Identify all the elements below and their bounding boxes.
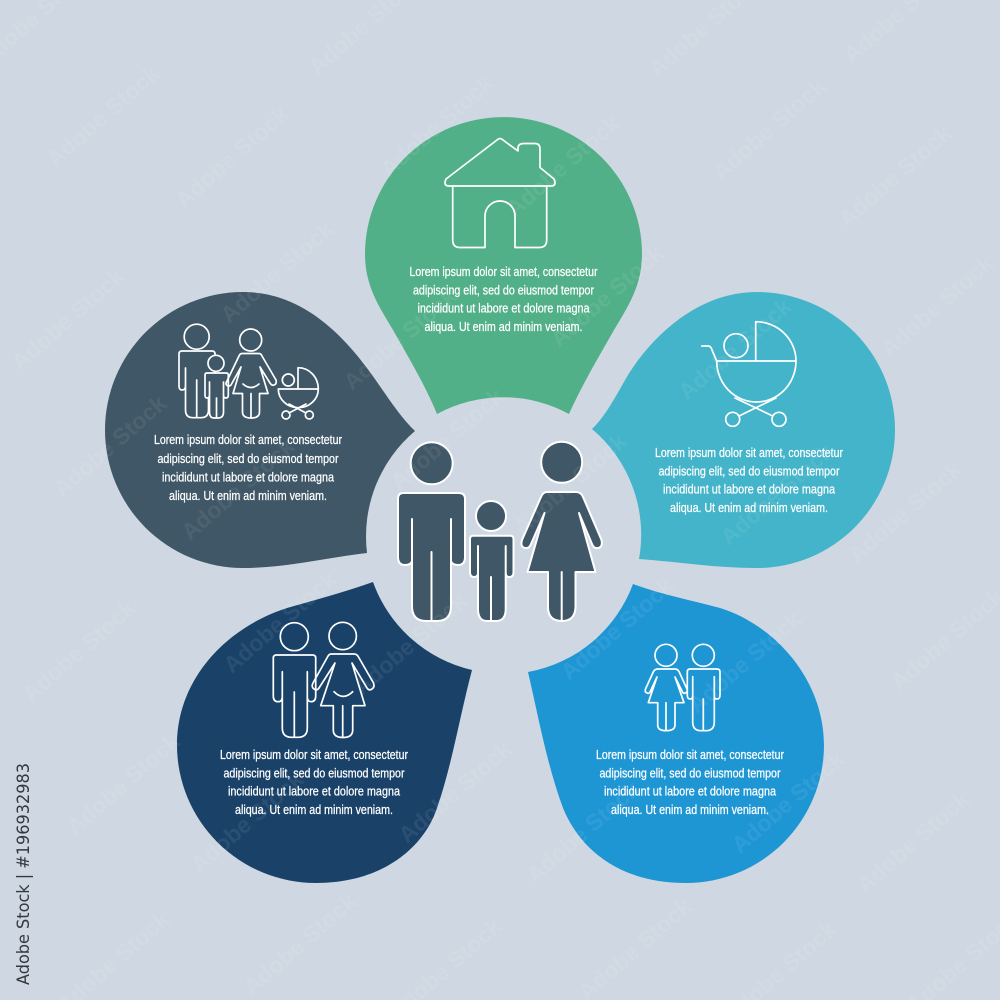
text: Adobe Stock [61,728,184,840]
text: Adobe Stock [215,216,338,328]
icon: house [445,138,555,248]
panel: cyan stroller petal [592,292,895,568]
text: Adobe Stock [843,456,966,568]
icon: central family figures [398,442,602,621]
panel: blue couple petal [528,584,824,883]
text: Adobe Stock [673,293,796,405]
figure: father [398,442,465,621]
text: Adobe Stock [393,736,516,848]
text block: navy petal: Lorem ipsum dolor sit amet, consectetur [220,747,409,762]
text: Adobe Stock [521,776,644,888]
text: Adobe Stock [501,110,624,222]
panel: slate family petal [105,292,415,568]
icon: family with stroller [179,324,318,419]
text: Adobe Stock [385,383,508,495]
text: Adobe Stock [833,120,956,232]
text block: blue petal: incididunt ut labore et dolore magna [604,784,777,799]
icon: woman and man [645,644,720,731]
text block: green petal [410,264,598,334]
text: Adobe Stock [707,73,830,185]
text: Adobe Stock [185,766,308,878]
text: Adobe Stock [726,746,849,858]
text block: blue petal [596,747,785,817]
text block: blue petal: Lorem ipsum dolor sit amet, consectetur [596,747,785,762]
text block: cyan petal: adipiscing elit, sed do eiusmod tempor [658,463,840,478]
figure: mother [521,442,602,621]
text block: green petal: Lorem ipsum dolor sit amet, consectetur [410,264,598,279]
text: Adobe Stock [348,588,471,700]
text block: navy petal [220,747,409,817]
panel: green home petal [365,117,642,414]
text: Adobe Stock [218,566,341,678]
text: Adobe Stock [338,283,461,395]
text block: slate petal [154,432,343,503]
petal shape: blue [528,584,824,883]
panel: navy couple petal [177,582,472,883]
icon: baby stroller [702,322,796,426]
text block: slate petal: adipiscing elit, sed do eiusmod tempor [158,451,339,466]
text block: cyan petal: incididunt ut labore et dolore magna [663,482,836,497]
text block: navy petal: incididunt ut labore et dolore magna [228,784,401,799]
figure: child [470,501,514,621]
text: Adobe Stock [683,606,806,718]
petal shape: navy [177,582,472,883]
petal shape: cyan [592,292,895,568]
text: Adobe Stock [715,438,838,550]
icon: man and pregnant woman [273,622,374,738]
text: Adobe Stock [17,595,140,707]
text block: navy petal: adipiscing elit, sed do eiusmod tempor [224,765,405,780]
text block: navy petal: aliqua. Ut enim ad minim veniam. [235,802,393,817]
text block: slate petal: Lorem ipsum dolor sit amet, consectetur [154,432,343,447]
text: Adobe Stock [545,240,668,352]
text block: green petal: incididunt ut labore et dolore magna [418,301,590,316]
text block: cyan petal: aliqua. Ut enim ad minim veniam. [670,500,828,515]
text: Adobe Stock [875,250,998,362]
text: Adobe Stock [238,888,361,1000]
text: Adobe Stock [170,101,293,213]
text block: slate petal: incididunt ut labore et dolore magna [162,470,335,484]
text block: green petal: adipiscing elit, sed do eiusmod tempor [413,282,595,297]
text: Adobe Stock [851,786,974,898]
text block: cyan petal: Lorem ipsum dolor sit amet, consectetur [655,445,844,460]
stock id caption: Adobe Stock | #196932983 [14,763,34,985]
text block: slate petal: aliqua. Ut enim ad minim veniam. [169,488,327,503]
text block: blue petal: aliqua. Ut enim ad minim veniam. [611,802,769,817]
petal shape: green [365,117,642,414]
text: Adobe Stock [176,433,299,545]
text block: green petal: aliqua. Ut enim ad minim veniam. [424,319,582,334]
text: Adobe Stock [6,263,129,375]
text: Adobe Stock [41,60,164,172]
text block: cyan petal [655,445,844,515]
text: Adobe Stock [555,573,678,685]
text: Adobe Stock [48,390,171,502]
text block: blue petal: adipiscing elit, sed do eiusmod tempor [600,765,781,780]
text: Adobe Stock [375,70,498,182]
text: Adobe Stock [508,428,631,540]
petal shape: slate [105,292,415,568]
